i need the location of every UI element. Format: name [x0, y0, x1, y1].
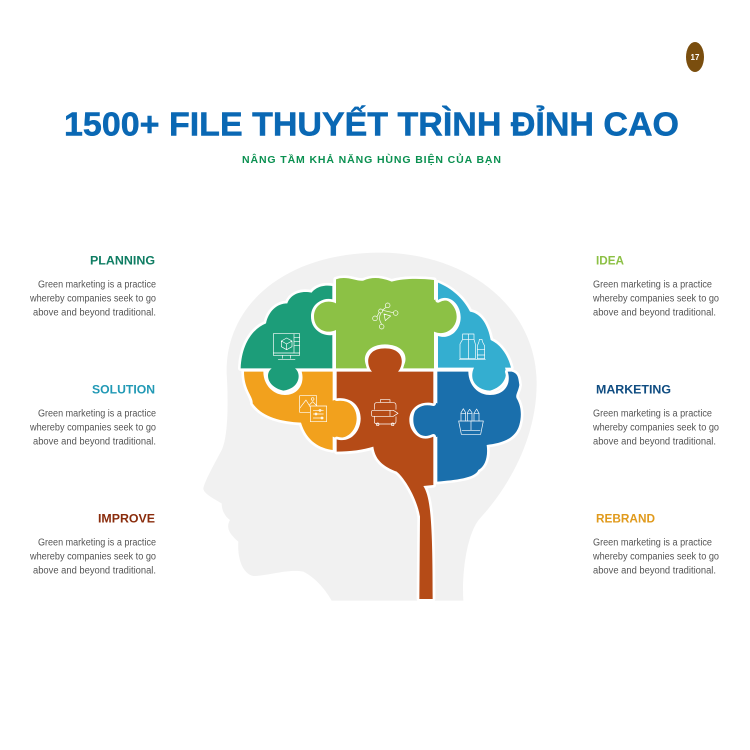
text block: rebrand: REBRAND — [596, 512, 655, 526]
puzzle piece: teal planning — [241, 286, 332, 391]
text block: marketing: MARKETING — [596, 382, 671, 396]
text block: solution: Green marketing is a practice — [38, 408, 156, 420]
text block: planning — [29, 254, 156, 318]
text block: marketing — [592, 382, 719, 448]
icon: monitor with cube — [273, 334, 300, 359]
icon: bezier pen tool — [373, 303, 398, 329]
text block: solution: above and beyond traditional. — [33, 436, 156, 448]
icon: image and sliders — [300, 396, 327, 422]
text block: solution: whereby companies seek to go — [29, 422, 156, 434]
puzzle piece: brown improve and brain stem — [337, 348, 433, 599]
text block: marketing: whereby companies seek to go — [592, 422, 719, 434]
head silhouette — [203, 253, 537, 601]
text block: rebrand — [592, 512, 719, 576]
text block: idea: Green marketing is a practice — [593, 280, 712, 290]
text block: planning: whereby companies seek to go — [29, 294, 156, 304]
icon: packaged goods — [459, 334, 485, 359]
icon: suitcase with pencil — [371, 400, 398, 426]
puzzle piece: dark blue marketing — [413, 372, 521, 482]
puzzle piece: light blue — [438, 283, 511, 391]
text block: planning: Green marketing is a practice — [38, 280, 156, 290]
page number badge: 17 — [691, 53, 700, 62]
text block: solution: SOLUTION — [92, 382, 155, 396]
text block: rebrand: whereby companies seek to go — [592, 552, 719, 562]
text block: idea: above and beyond traditional. — [593, 308, 716, 318]
puzzle piece: orange solution — [244, 372, 357, 450]
text block: idea — [592, 254, 719, 318]
text block: planning: PLANNING — [90, 254, 155, 268]
text block: idea: whereby companies seek to go — [592, 294, 719, 304]
text block: improve: whereby companies seek to go — [29, 552, 156, 562]
title: 1500+ FILE THUYẾT TRÌNH ĐỈNH CAO — [64, 106, 679, 142]
text block: marketing: above and beyond traditional. — [593, 436, 716, 448]
text block: improve — [29, 512, 156, 576]
subtitle: NÂNG TẦM KHẢ NĂNG HÙNG BIỆN CỦA BẠN — [242, 153, 501, 166]
text block: rebrand: Green marketing is a practice — [593, 538, 712, 548]
text block: marketing: Green marketing is a practice — [593, 408, 712, 420]
text block: solution — [29, 382, 156, 448]
puzzle piece: green top — [314, 278, 457, 368]
icon: pencil cup — [459, 409, 483, 434]
head and brain illustration — [203, 253, 537, 601]
text block: improve: Green marketing is a practice — [38, 538, 156, 548]
text block: planning: above and beyond traditional. — [33, 308, 156, 318]
text block: idea: IDEA — [596, 254, 624, 268]
text block: rebrand: above and beyond traditional. — [593, 566, 716, 576]
text block: improve: above and beyond traditional. — [33, 566, 156, 576]
text block: improve: IMPROVE — [98, 512, 155, 526]
page number badge — [686, 42, 704, 72]
